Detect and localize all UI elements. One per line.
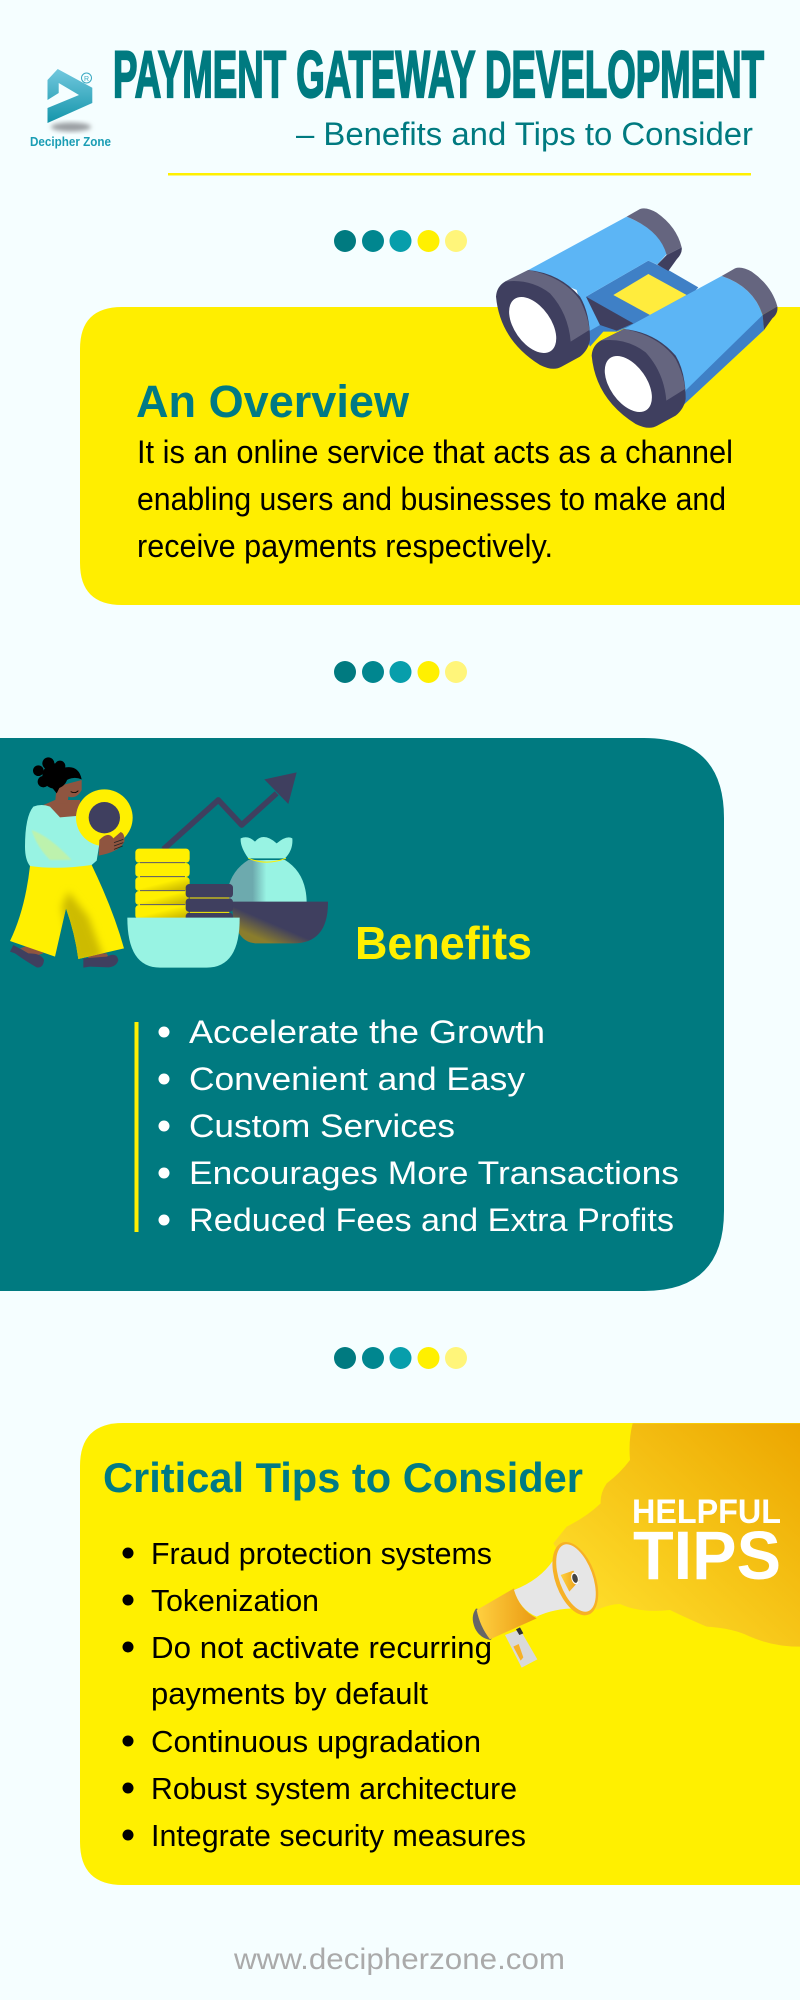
tips list	[122, 1536, 526, 1853]
panel: overview	[80, 307, 800, 605]
icon: woman holding coin	[10, 757, 133, 968]
overview body text: enabling users and businesses to make and	[137, 481, 726, 517]
benefits list: Custom Services	[189, 1108, 455, 1144]
orange speech burst	[553, 1423, 800, 1647]
heading: Critical Tips: Critical Tips to Consider	[103, 1454, 583, 1501]
logo: Decipher Zone: Decipher Zone	[30, 135, 111, 149]
panel: benefits	[0, 738, 724, 1291]
overview body text: receive payments respectively.	[137, 528, 553, 564]
dots divider 3	[334, 1347, 467, 1369]
helpful tips label: HELPFUL	[632, 1493, 781, 1531]
tips list: Integrate security measures	[151, 1818, 526, 1853]
icon: money bag and dark bowl	[226, 837, 328, 943]
tips list: payments by default	[151, 1676, 428, 1711]
heading: Benefits: Benefits	[355, 917, 532, 969]
panel: critical tips	[80, 1423, 800, 1885]
heading: An Overview: An Overview	[136, 376, 410, 427]
icon: megaphone	[473, 1536, 607, 1668]
tips list: Fraud protection systems	[151, 1536, 492, 1571]
tips list: Tokenization	[151, 1583, 319, 1618]
benefits list: Encourages More Transactions	[189, 1155, 679, 1191]
subtitle: – Benefits and Tips to Consider	[296, 116, 753, 152]
benefits list: Accelerate the Growth	[189, 1014, 545, 1050]
dots divider 1	[334, 230, 467, 252]
tips list: Continuous upgradation	[151, 1724, 481, 1759]
footer website: www.decipherzone.com	[233, 1943, 565, 1976]
logo: Decipher Zone: R	[84, 76, 89, 83]
helpful tips label: TIPS	[633, 1517, 781, 1594]
icon: coin stacks and mint bowl	[127, 849, 240, 968]
icon: growth arrow	[163, 772, 297, 849]
tips list: Robust system architecture	[151, 1771, 517, 1806]
benefits list: Reduced Fees and Extra Profits	[189, 1202, 674, 1238]
overview body text: It is an online service that acts as a channel	[137, 434, 733, 470]
logo: Decipher Zone	[30, 69, 111, 149]
overview body text	[137, 434, 733, 564]
tips list: Do not activate recurring	[151, 1630, 492, 1665]
dots divider 2	[334, 661, 467, 683]
icon: binoculars	[496, 208, 777, 428]
benefits list	[134, 1014, 679, 1238]
illustration: woman with coins and growth arrow	[10, 757, 328, 968]
benefits list: Convenient and Easy	[189, 1061, 525, 1097]
